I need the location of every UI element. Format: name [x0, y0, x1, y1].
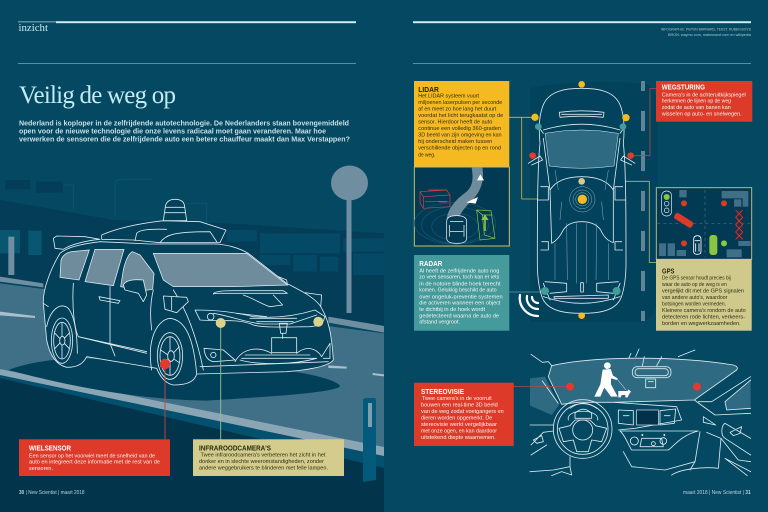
mirror and body details	[43, 277, 330, 370]
panel: stereovisie: van de weg zodat voetgangers en	[421, 409, 504, 415]
intro text: open voor de nieuwe technologie die onze levens radicaal moet gaan veranderen. Maar hoe	[19, 128, 326, 135]
icon: roadside post	[363, 398, 376, 482]
crosshatched road works	[736, 210, 743, 239]
footer right: maart 2018 | New Scientist | 31	[683, 490, 751, 496]
panel: lidar: voordat het licht terugkaatst op de	[418, 113, 503, 119]
panel: radar	[414, 255, 509, 331]
panel: infraroodcamera's: andere weggebruikers te blinderen met felle lampen.	[199, 465, 328, 471]
scanning car	[447, 216, 467, 243]
title: Veilig de weg op	[19, 82, 176, 109]
panel: radar: die activeren wanneer een object	[419, 301, 501, 307]
panel: lidar: de weg.	[418, 152, 436, 158]
sensor marker: infrared cameras	[216, 317, 323, 440]
gps map illustration	[656, 188, 752, 259]
lidar sensor rings	[570, 187, 595, 212]
spoiler and roof sensor pod	[53, 199, 226, 249]
panel: radar: zo veel sensoren, toch kan er iets	[419, 275, 499, 281]
connector lines	[509, 88, 656, 292]
panel: wegsturing: herkennen de lijnen op de weg	[662, 99, 731, 105]
panel: stereovisie: Twee camera's in de voorruit	[422, 396, 492, 402]
panel: gps: vergelijkt dit met de GPS signalen	[662, 288, 744, 294]
left page scenery	[0, 150, 384, 512]
panel: lidar	[414, 81, 509, 167]
sensor marker: stereo cameras	[513, 383, 701, 391]
car illustration	[8, 199, 340, 401]
icon: radar waves	[520, 295, 538, 316]
panel: wegsturing: WEGSTURING	[662, 82, 705, 91]
panel: wielsensor: sensoren.	[29, 466, 53, 472]
panel: radar: afstand vergroot.	[419, 320, 460, 326]
panel: radar: Al heeft de zelfrijdende auto nog	[419, 268, 499, 274]
panel: wegsturing	[656, 81, 752, 122]
panel: gps: borden en wegwerkzaamheden.	[662, 321, 741, 327]
panel: lidar: LIDAR	[418, 85, 439, 94]
windshield	[545, 130, 618, 168]
panel: gps: GPS	[662, 266, 674, 275]
panel: lidar: Het LIDAR systeem vuurt	[418, 94, 479, 100]
panel: lidar: 3D beeld van zijn omgeving en kan	[418, 133, 502, 139]
scanned object: red box	[420, 190, 450, 208]
panel: infraroodcamera's: INFRAROODCAMERA'S	[199, 443, 271, 452]
panel: lidar: continue een volledig 360-graden	[418, 126, 501, 132]
intro text	[19, 120, 350, 143]
panel: stereovisie: dieren worden opgemerkt. De	[421, 415, 492, 421]
top view road	[530, 81, 658, 322]
panel: wegsturing: zodat de auto van banen kan	[662, 105, 731, 111]
panel: gps: Kleinere camera's rondom de auto	[662, 308, 746, 314]
panel: lidar: sensor. Hierdoor heeft de auto	[418, 120, 492, 126]
credits	[661, 28, 752, 37]
panel: infraroodcamera's: Twee infraroodcamera's verbeteren het zicht in het	[200, 453, 326, 459]
panel: wielsensor	[19, 439, 170, 476]
rear wheel	[47, 306, 77, 363]
interior lines	[530, 349, 751, 476]
intro text: Nederland is koploper in de zelfrijdende autotechnologie. De Nederlanders staan bovengemiddeld	[19, 120, 349, 127]
panel: wegsturing: Camera's in de achteruitkijkspiegel	[662, 92, 746, 98]
windows	[530, 358, 751, 415]
panel: gps: botsingen worden vermeden.	[662, 301, 726, 307]
section label: inzicht	[18, 23, 48, 34]
panel: gps	[656, 259, 752, 331]
vehicles	[673, 212, 717, 255]
panel: stereovisie: met onze ogen, en kan daardoor	[421, 429, 497, 435]
panel: radar: komen. Gelukkig beschikt de auto	[419, 288, 497, 294]
panel: gps: detecteren rode lichten, verkeers-	[662, 314, 745, 320]
top view car	[528, 81, 635, 319]
panel: lidar: miljoenen laserpulsen per seconde	[418, 100, 502, 106]
steering wheel	[553, 400, 612, 458]
icon: road sign	[331, 166, 368, 313]
panel: wielsensor: auto en integreert deze informatie met de rest van de	[29, 460, 160, 466]
panel: infraroodcamera's	[193, 439, 344, 476]
panel: stereovisie: stereovisie werkt vergelijkbaar	[421, 422, 497, 428]
panel: lidar: hij onderscheid maken tussen	[418, 139, 492, 145]
front wheel	[150, 318, 197, 379]
panel: stereovisie: bouwen een real-time 3D beeld	[421, 402, 498, 408]
pedestrian and dog	[594, 362, 631, 397]
panel: wielsensor: WIELSENSOR	[29, 444, 71, 453]
panel: wielsensor: Een sensor op het voorwiel meet de snelheid van de	[29, 453, 155, 459]
panel: radar: over ongeluk-preventie systemen	[419, 294, 503, 300]
panel: gps: waar de auto op de weg is en	[661, 282, 727, 288]
scanned object: green box	[477, 210, 495, 240]
car interior illustration	[530, 349, 751, 476]
panel: gps: De GPS sensor houdt precies bij	[662, 276, 731, 282]
lidar scan illustration	[414, 167, 509, 246]
panel: stereovisie	[414, 383, 514, 446]
intro text: verwerken de sensoren die de zelfrijdende auto een betere chauffeur maakt dan Max Verstappen?	[19, 136, 350, 143]
panel: stereovisie: uitstekend diepte waarnemen.	[421, 435, 496, 441]
panel: infraroodcamera's: donker en in slechte weeromstandigheden, zonder	[199, 459, 324, 465]
footer left: 30 | New Scientist | maart 2018	[19, 490, 85, 496]
windows	[60, 249, 287, 291]
panel: radar: gedetecteerd waarna de auto de	[419, 314, 499, 320]
sensor marker: wheel sensor	[160, 359, 170, 440]
panel: radar: te dichtbij in de hoek wordt	[419, 307, 485, 313]
left page header rule	[18, 21, 356, 64]
panel: stereovisie: STEREOVISIE	[421, 387, 464, 396]
credits: INFOGRAPHIC: PEPIJN BARNARD, TEKST: RUBEN BOYD	[661, 28, 751, 32]
right page header rule	[413, 21, 751, 64]
panel: lidar: verschillende objecten op en rond	[418, 146, 501, 152]
panel: gps: van andere auto's, waardoor	[662, 295, 727, 301]
road edge and foreground	[0, 369, 384, 512]
panel: radar: in de notoire blinde hoek terecht	[419, 281, 501, 287]
credits: BRON: waymo.com, makeuseof.com en wikipedia	[668, 33, 752, 37]
sensor markers	[529, 81, 634, 319]
panel: wegsturing: wisselen op auto- en snelwegen.	[661, 112, 742, 118]
panel: radar: RADAR	[419, 259, 443, 268]
traffic light	[662, 191, 672, 216]
panel: lidar: af en meet zo hoe lang het duurt	[418, 106, 497, 112]
